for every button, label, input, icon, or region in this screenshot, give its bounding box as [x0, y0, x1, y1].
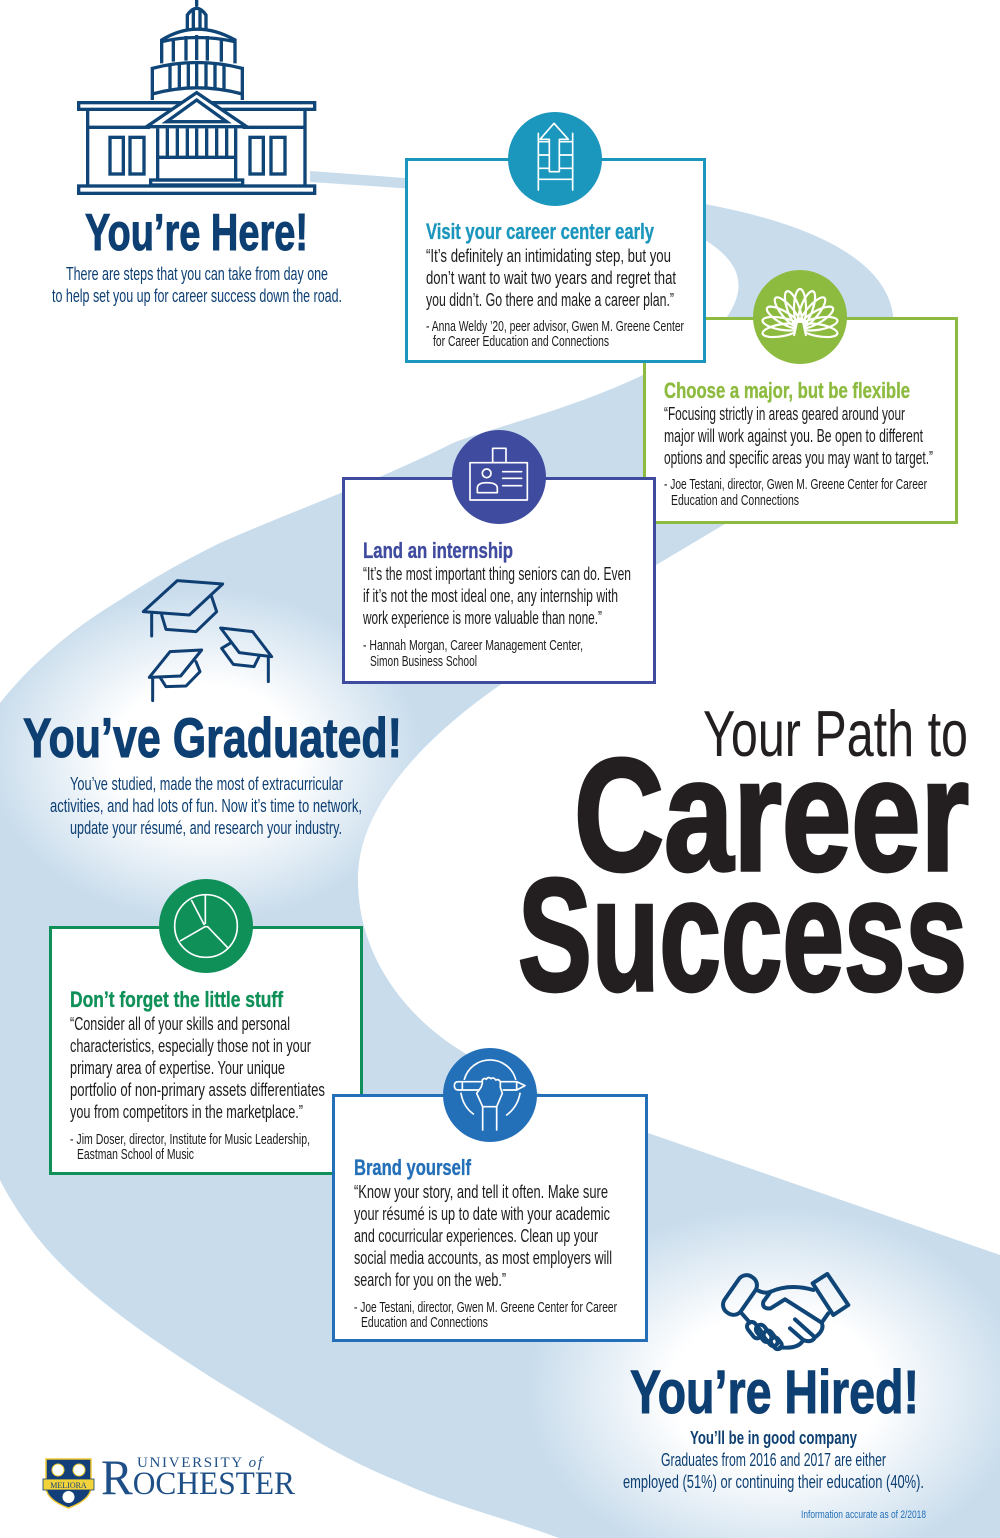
panel: choose a major	[644, 270, 956, 522]
logo: University of Rochester: UNIVERSITY of	[137, 1455, 264, 1471]
icon: capitol building	[79, 0, 315, 193]
panel: visit your career center	[406, 112, 704, 362]
heading: You've Graduated: You’ve Graduated!	[23, 706, 402, 769]
panel: don't forget the little stuff	[50, 879, 362, 1174]
text: graduated description: activities, and had lots of fun. Now it’s time to network,	[50, 796, 362, 816]
panel: land an internship: “It’s the most important thing seniors can do. Even	[363, 564, 631, 584]
panel: land an internship: Land an internship	[363, 538, 513, 563]
icon: fan	[753, 270, 847, 364]
text: hired description: You’ll be in good company	[690, 1428, 857, 1448]
panel: don't forget the little stuff: you from competitors in the marketplace.”	[70, 1102, 303, 1122]
panel: don't forget the little stuff: characteristics, especially those not in your	[70, 1036, 311, 1056]
footnote: Information accurate as of 2/2018	[801, 1509, 926, 1521]
text: intro: There are steps that you can take from day one	[66, 264, 328, 284]
panel: visit your career center: don’t want to wait two years and regret that	[426, 268, 676, 288]
panel: don't forget the little stuff: Don’t forget the little stuff	[70, 987, 284, 1012]
text: hired description	[623, 1428, 924, 1492]
text: intro	[52, 264, 342, 306]
icon: ladder with arrow	[508, 112, 602, 206]
panel: don't forget the little stuff: - Jim Doser, director, Institute for Music Leadership,	[70, 1132, 310, 1148]
icon: ID badge	[452, 430, 546, 524]
panel: brand yourself: your résumé is up to date with your academic	[354, 1204, 610, 1224]
text: graduated description: You’ve studied, made the most of extracurricular	[70, 774, 343, 794]
panel: brand yourself	[334, 1048, 646, 1340]
panel: choose a major: Choose a major, but be flexible	[664, 378, 910, 403]
panel: visit your career center: - Anna Weldy ’20, peer advisor, Gwen M. Greene Center	[426, 319, 684, 335]
panel: brand yourself: - Joe Testani, director, Gwen M. Greene Center for Career	[354, 1300, 617, 1316]
text: hired description: Graduates from 2016 and 2017 are either	[661, 1450, 886, 1470]
title	[518, 697, 969, 1024]
panel: brand yourself: search for you on the web.”	[354, 1270, 506, 1290]
panel: brand yourself: Education and Connections	[361, 1315, 488, 1331]
panel: don't forget the little stuff: primary area of expertise. Your unique	[70, 1058, 285, 1078]
panel: visit your career center: for Career Education and Connections	[433, 334, 609, 350]
panel: land an internship: - Hannah Morgan, Career Management Center,	[363, 638, 583, 654]
panel: visit your career center: you didn’t. Go there and make a career plan.”	[426, 290, 674, 310]
icon: fist holding pencil	[443, 1048, 537, 1142]
icon: shield crest	[43, 1459, 94, 1508]
heading: You're Hired: You’re Hired!	[630, 1358, 919, 1426]
logo: University of Rochester: ROCHESTER	[101, 1449, 295, 1505]
text: intro: to help set you up for career success down the road.	[52, 286, 342, 306]
panel: visit your career center: “It’s definitely an intimidating step, but you	[426, 246, 671, 266]
icon: pie chart	[159, 879, 253, 973]
panel: land an internship: work experience is more valuable than none.”	[362, 608, 602, 628]
text: graduated description: update your résumé, and research your industry.	[70, 818, 342, 838]
panel: don't forget the little stuff: “Consider all of your skills and personal	[70, 1014, 290, 1034]
heading: You're Here: You’re Here!	[85, 204, 308, 262]
panel: choose a major: Education and Connections	[671, 493, 799, 509]
icon: shield crest: MELIORA	[50, 1481, 87, 1490]
panel: land an internship: if it’s not the most ideal one, any internship with	[363, 586, 618, 606]
white glow behind graduated section	[0, 587, 423, 923]
panel: brand yourself: Brand yourself	[354, 1155, 472, 1180]
panel: don't forget the little stuff: Eastman School of Music	[77, 1147, 194, 1163]
icon: graduation caps	[143, 581, 272, 701]
panel: brand yourself: social media accounts, as most employers will	[354, 1248, 612, 1268]
panel: brand yourself: and cocurricular experiences. Clean up your	[354, 1226, 598, 1246]
panel: land an internship: Simon Business School	[370, 654, 477, 670]
panel: land an internship	[344, 430, 654, 682]
text: graduated description	[50, 774, 362, 838]
white glow behind hired section	[525, 1205, 1000, 1538]
panel: brand yourself: “Know your story, and tell it often. Make sure	[354, 1182, 608, 1202]
panel: don't forget the little stuff: portfolio of non-primary assets differentiates	[70, 1080, 325, 1100]
icon: handshake	[719, 1272, 848, 1351]
panel: visit your career center: Visit your career center early	[426, 219, 655, 244]
